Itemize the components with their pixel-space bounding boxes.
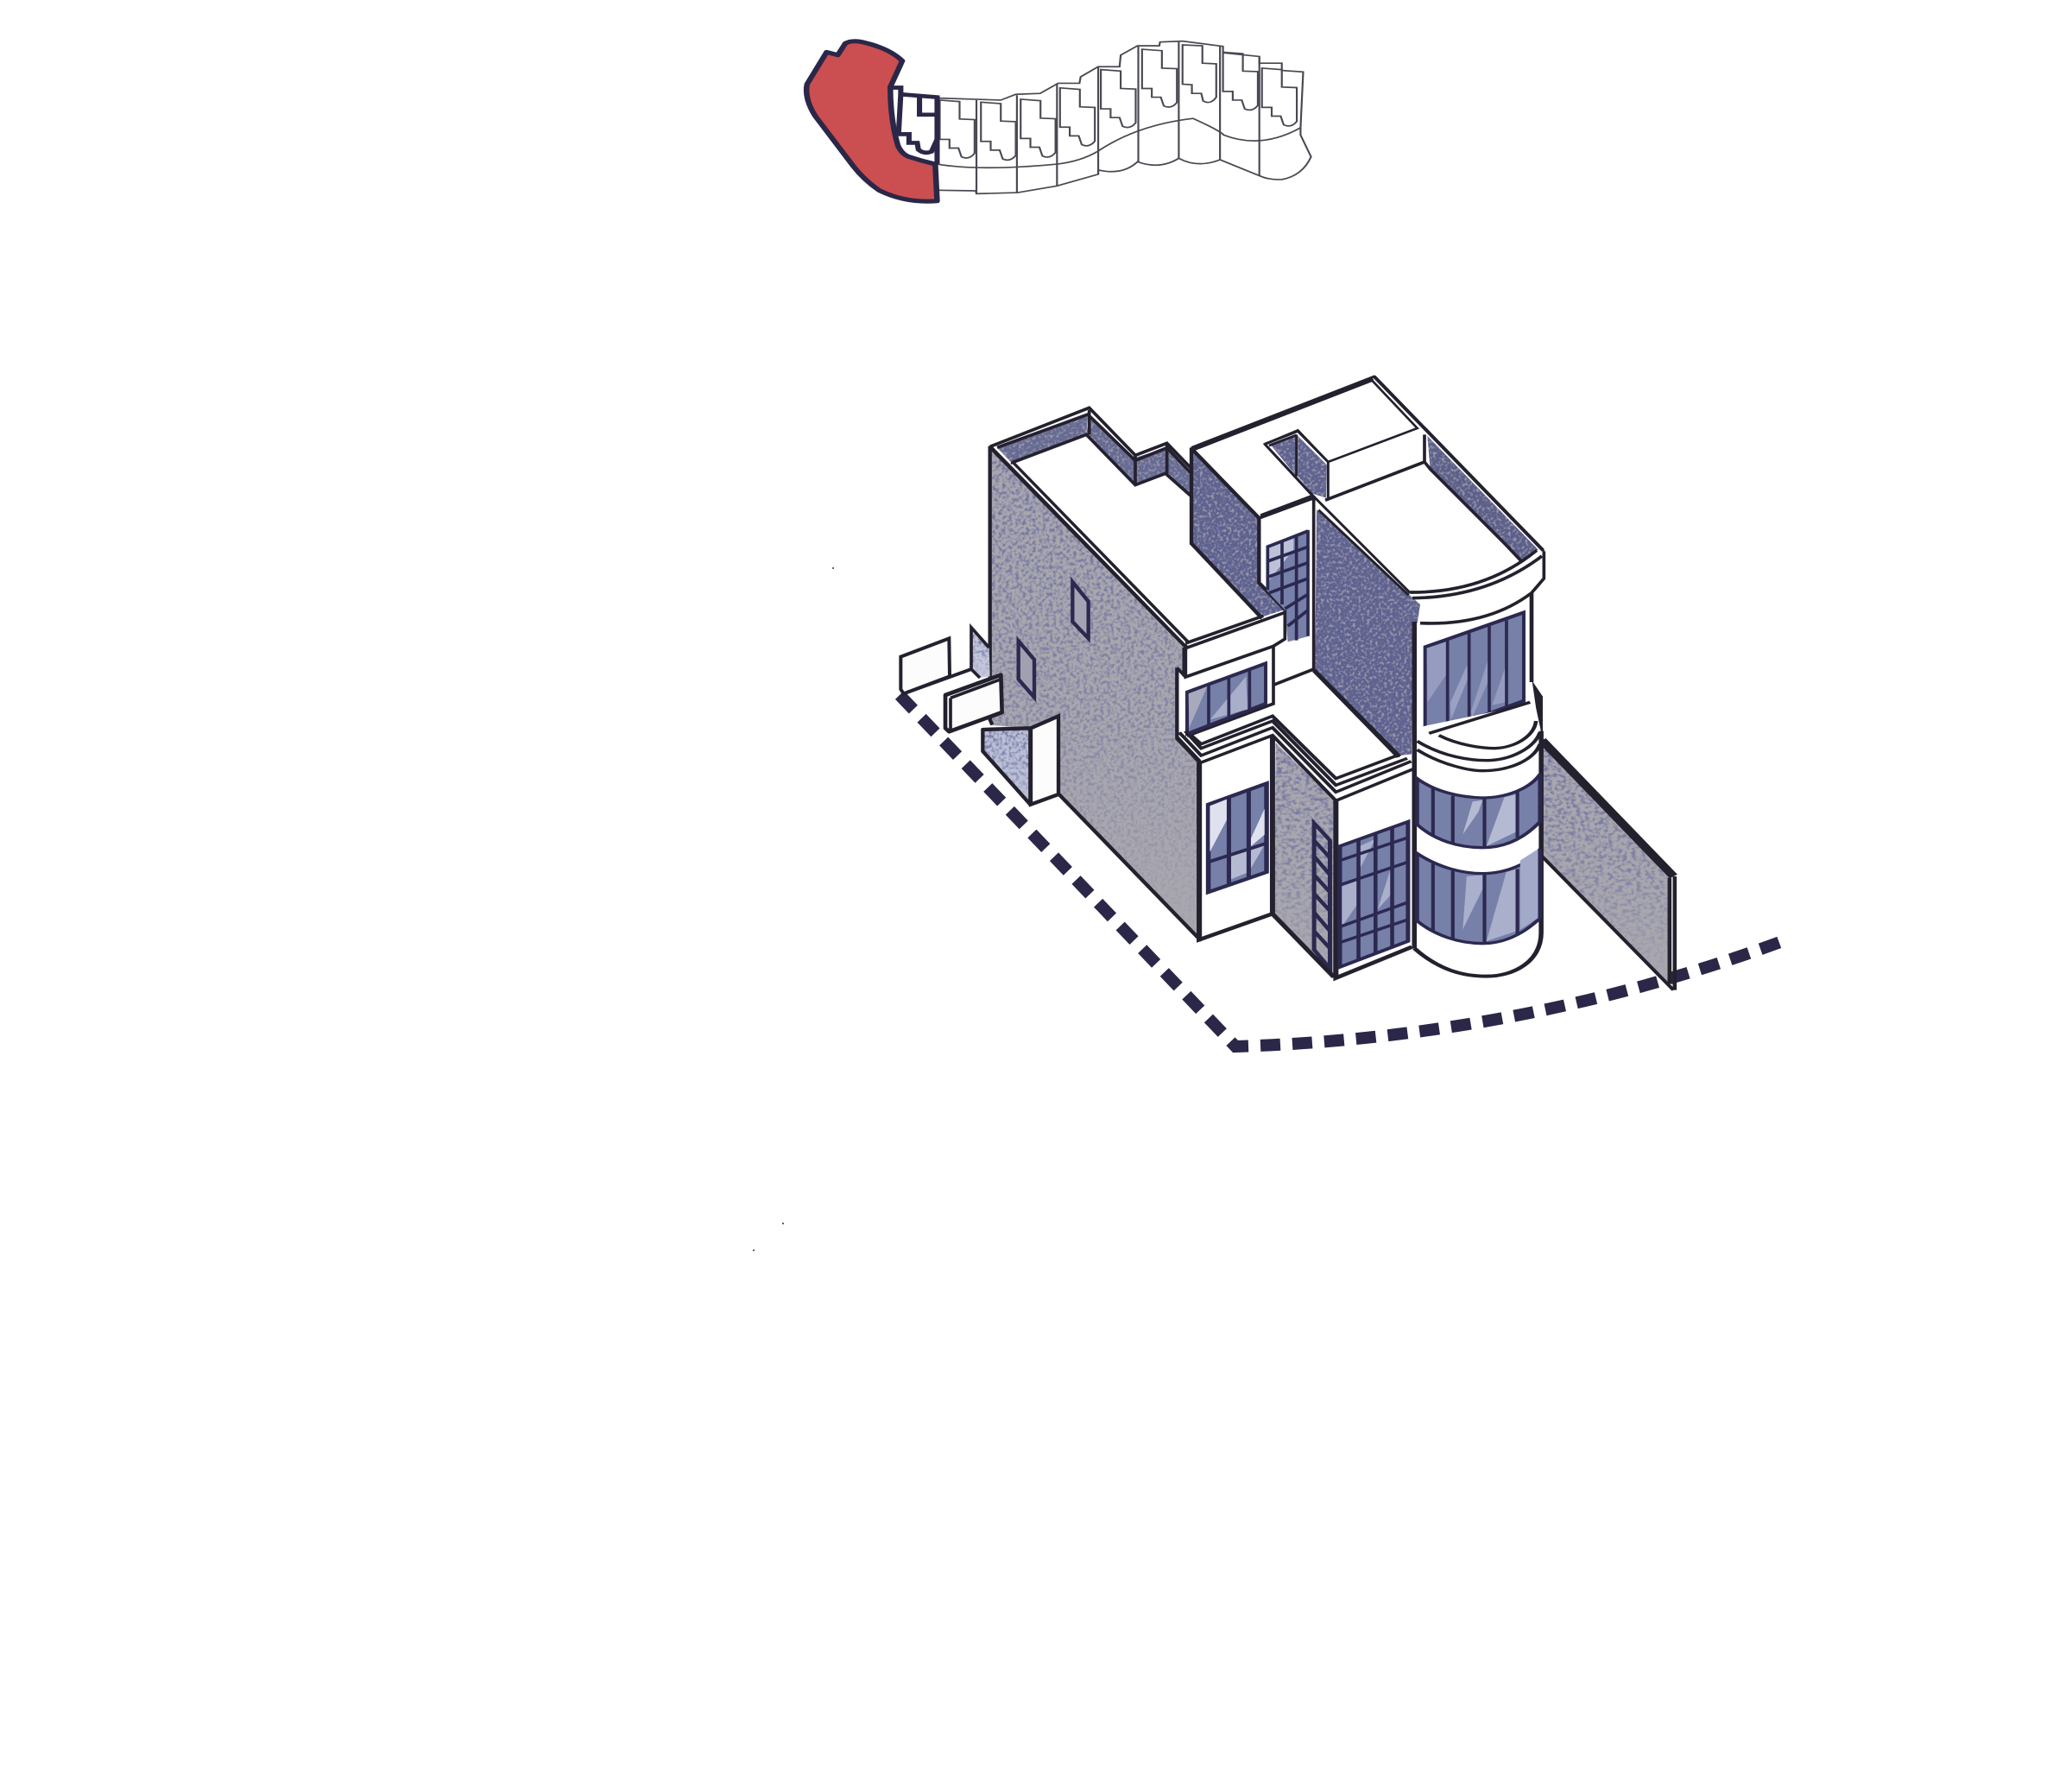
lower band light streak 3: [1520, 849, 1538, 930]
stair window grid: [1267, 529, 1310, 642]
left wing of the house: [900, 408, 1200, 939]
garden wall base and post: [1542, 857, 1675, 990]
curved parapet: [1410, 550, 1544, 623]
ground window light streak 2: [1248, 809, 1265, 848]
balcony window light streaks: [1189, 686, 1207, 728]
row of neighbouring houses: [937, 41, 1311, 193]
upper roof outlines: [1191, 376, 1544, 551]
upper band light streak: [1462, 800, 1482, 835]
long diagonal roof edge: [1313, 496, 1410, 595]
light shaft outlines: [1265, 431, 1328, 498]
terrace side line: [1314, 671, 1399, 757]
specks: [753, 567, 834, 1251]
ground window mullions: [1209, 790, 1267, 885]
lower recessed wall: [1274, 743, 1334, 977]
upper tower window mullions: [1448, 620, 1507, 728]
upper band mullions: [1433, 788, 1518, 848]
entrance recess outline: [982, 728, 1030, 805]
sign wall detail: [951, 680, 1001, 731]
highlighted plot in red: [806, 41, 937, 201]
tower window band lower: [1417, 849, 1540, 944]
roof parapet outlines: [990, 408, 1191, 496]
upper tower window light streak 3: [1471, 656, 1489, 718]
fence wedge base: [971, 628, 990, 678]
terrace lines: [1325, 434, 1521, 560]
balcony band lines: [1177, 610, 1285, 762]
stair window mullions: [1267, 530, 1308, 641]
upper roof thick edge: [1194, 376, 1543, 550]
upper tower window light streak 2: [1450, 665, 1468, 719]
front grid window: [1340, 822, 1408, 967]
site boundary dashed line: [900, 695, 1780, 1046]
ground window light streak: [1210, 799, 1229, 852]
lower floors, curved tower and garden wall: [1177, 622, 1675, 990]
large dark wall base line: [1315, 670, 1400, 756]
tower window band upper: [1417, 775, 1540, 848]
tower edge lines: [1414, 593, 1532, 734]
light shaft faces: [1271, 436, 1327, 498]
side wall outlines: [990, 446, 1200, 939]
fence wedge grain: [971, 628, 990, 678]
dark wall behind left wing: [1191, 451, 1285, 617]
dark wall outline: [1191, 447, 1285, 618]
entrance recess base: [982, 728, 1030, 805]
garden wall face: [1542, 743, 1669, 983]
ladder window: [1314, 823, 1330, 969]
small wall window lower: [1019, 641, 1034, 698]
front window light streak 3: [1378, 869, 1391, 909]
side wall base: [990, 447, 1200, 939]
lower band mullions: [1433, 863, 1518, 944]
upper tower window: [1425, 612, 1524, 736]
upper tower window light streak 4: [1492, 667, 1506, 705]
ground window light streak 3: [1231, 844, 1265, 879]
front window light streak 2: [1360, 839, 1375, 869]
rear parapet face: [1427, 436, 1538, 560]
ground floor window: [1209, 783, 1267, 892]
stepped ledge lines: [1177, 716, 1413, 800]
fence wedge outline: [971, 628, 989, 678]
lower recessed wall grain: [1274, 743, 1334, 977]
large dark wall: [1315, 509, 1420, 756]
stair window light panes: [1267, 535, 1293, 585]
entrance door panel: [1031, 716, 1058, 805]
front window mullions: [1340, 827, 1408, 960]
highlighted house footprint: [891, 87, 937, 164]
small wall window upper: [1072, 582, 1089, 638]
front window light streak: [1342, 881, 1358, 926]
balcony curved bands: [1417, 702, 1540, 771]
fence panel: [900, 638, 971, 693]
upper tower window light streaks: [1427, 642, 1446, 702]
garden wall grain: [1542, 743, 1669, 983]
ground floor facade lines: [1199, 737, 1412, 978]
lower band light streak: [1462, 875, 1482, 930]
roof parapet faces: [997, 414, 1190, 496]
garden wall outlines: [1542, 740, 1673, 876]
upper band light streak 2: [1487, 794, 1516, 846]
white tower facade lines: [1259, 498, 1314, 685]
tower outline: [1414, 622, 1541, 977]
sign wall: [945, 675, 1002, 731]
curved tower body: [1414, 704, 1541, 977]
balcony window light streak 2: [1210, 676, 1248, 719]
tower dark shoulder: [1532, 680, 1543, 740]
balcony window: [1187, 663, 1266, 734]
entrance recess grain: [982, 728, 1030, 805]
key plan: row of houses with highlighted plot: [806, 41, 1311, 201]
lower band light streak 2: [1487, 869, 1516, 941]
side wall grain: [990, 447, 1200, 939]
centre volume of the house: [1177, 376, 1544, 762]
balcony window mullions: [1209, 670, 1249, 727]
roof front edge: [990, 446, 1188, 647]
